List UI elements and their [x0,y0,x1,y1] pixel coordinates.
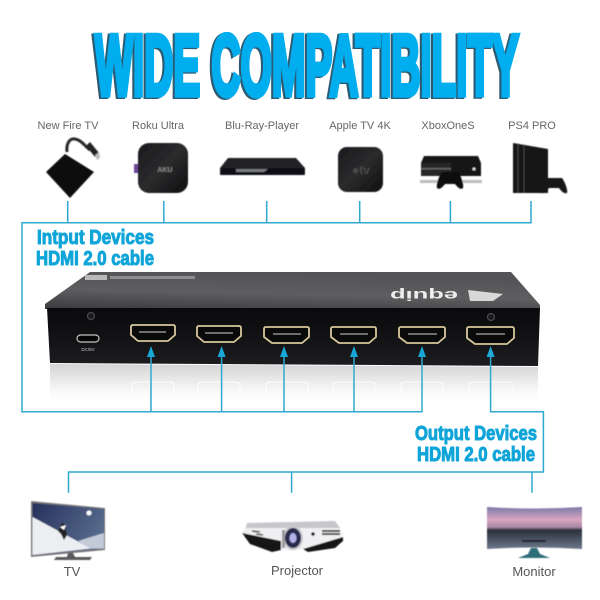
output device labels: Monitor [512,564,556,579]
icon: Monitor [487,507,582,558]
brand mark [468,290,503,301]
HDMI port pins [139,332,505,334]
icon: Xbox One S [420,156,482,189]
input device labels: New Fire TV [38,120,99,132]
icon: Fire TV [46,139,100,198]
switch device [45,272,540,400]
heading: output devices: Output Devices [415,423,537,445]
heading: input devices [36,227,154,270]
power port [77,335,99,352]
heading: input devices: HDMI 2.0 cable [36,248,154,270]
icon: TV [31,501,105,560]
icon: PS4 Pro [513,143,567,193]
input device labels [38,120,556,132]
power port: DC/5V [81,347,95,352]
input device labels: Roku Ultra [132,120,185,132]
ghost reflection of ports [132,382,513,392]
device top panel [45,272,540,309]
connection lines: output devices [68,350,543,493]
input device labels: XboxOneS [421,120,475,132]
heading: input devices: Intput Devices [37,227,154,249]
connection lines: input devices [22,201,531,412]
icon: Projector [242,521,343,552]
icon: Blu-Ray player [220,158,305,175]
output device labels [64,563,556,579]
icon: Roku Ultra [134,143,188,193]
top panel brand: equip [390,288,458,304]
device reflection [50,364,538,400]
input device labels: Apple TV 4K [329,120,391,132]
icon: Apple TV: ●tv [352,163,370,177]
icon: Roku Ultra: AKU [157,167,173,174]
input device labels: Blu-Ray-Player [225,120,299,132]
arrows to ports [147,346,495,357]
top panel small print [85,275,195,280]
device front panel [47,308,540,366]
output device labels: Projector [271,563,324,578]
output device labels: TV [64,564,81,579]
heading: output devices [415,423,537,466]
heading: output devices: HDMI 2.0 cable [417,444,535,466]
input device labels: PS4 PRO [508,120,556,132]
screws [88,312,494,320]
icon: Apple TV [338,147,383,192]
HDMI ports [131,325,514,344]
